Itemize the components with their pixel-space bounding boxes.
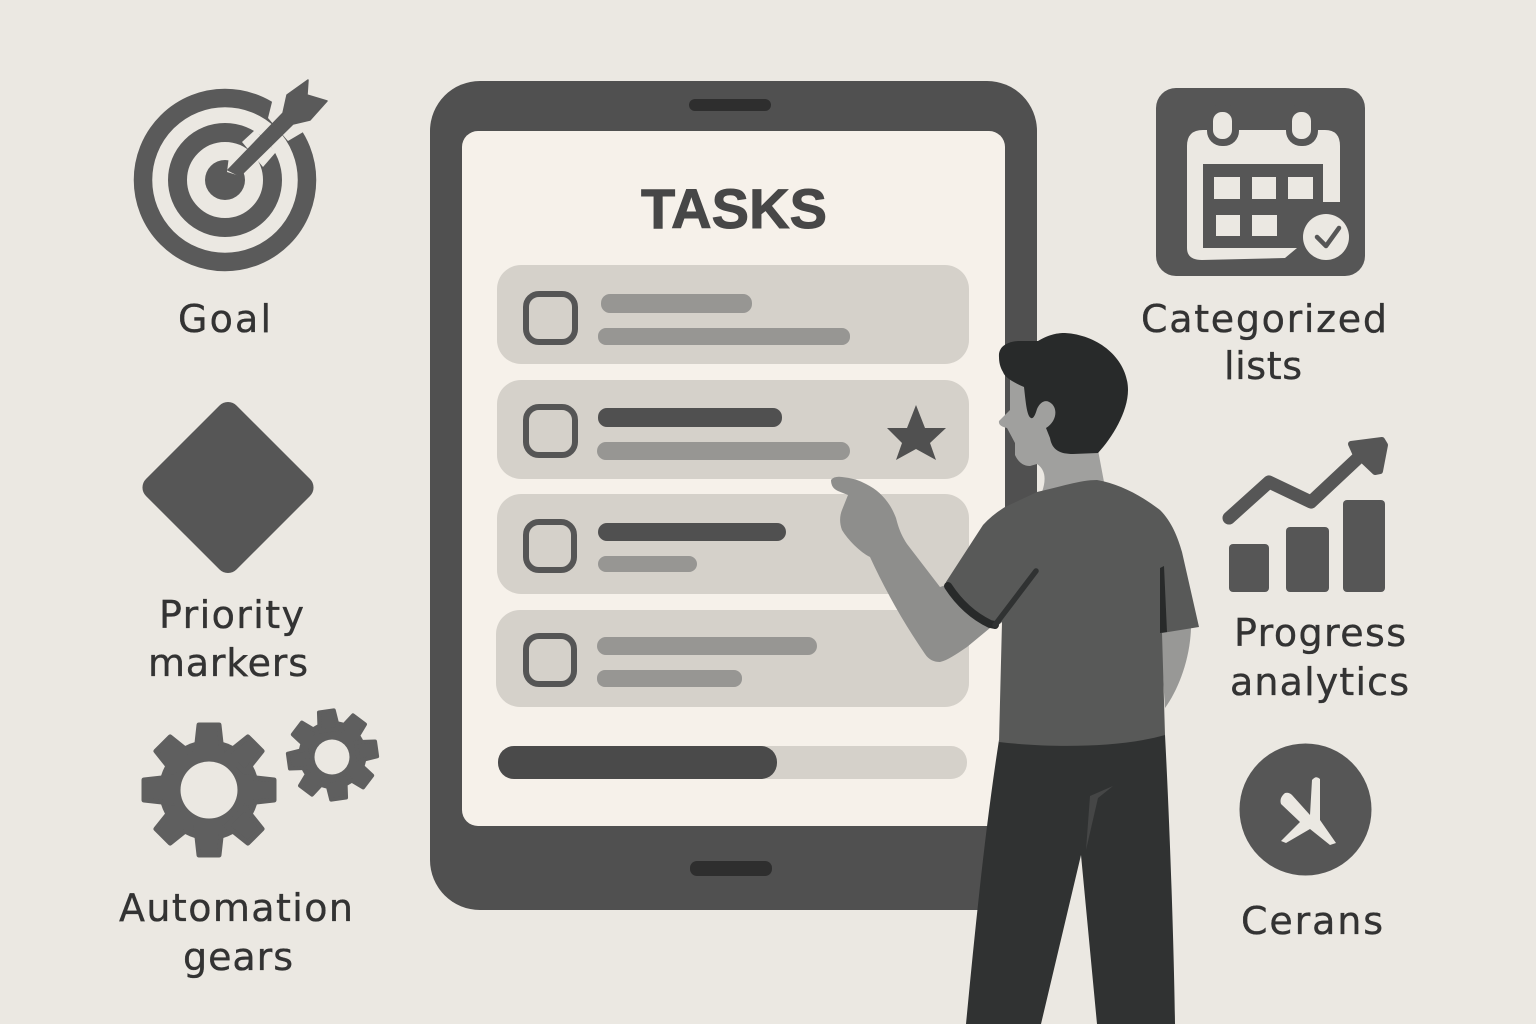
person hair [999, 333, 1128, 454]
icon: star [887, 405, 946, 460]
label: categorized lists: Categorized [1141, 297, 1387, 341]
person back sleeve crease [1160, 566, 1167, 633]
label: priority markers [148, 593, 308, 685]
icon: categorized lists calendar [1156, 88, 1365, 276]
label: progress analytics [1230, 611, 1409, 704]
icon: goal target [143, 80, 327, 262]
label: priority markers: Priority [159, 593, 304, 637]
person pointing at tablet [831, 333, 1199, 1024]
task row 4 [496, 610, 969, 707]
person neck and face [999, 376, 1104, 492]
label: categorized lists [1141, 297, 1387, 388]
person sleeve crease [995, 571, 1036, 625]
tablet screen [462, 131, 1005, 826]
label: progress analytics: Progress [1234, 611, 1406, 655]
person shirt [946, 480, 1199, 746]
icon: automation gears [144, 710, 377, 855]
icon: cerans circle [1240, 744, 1372, 876]
label: automation gears: gears [183, 935, 293, 979]
heading: tasks: TASKS [641, 177, 827, 240]
label: automation gears [119, 886, 353, 979]
person pointing arm and hand [831, 477, 990, 662]
label: automation gears: Automation [119, 886, 353, 930]
label: progress analytics: analytics [1230, 660, 1409, 704]
label: priority markers: markers [148, 641, 308, 685]
label: cerans: Cerans [1241, 899, 1383, 943]
person sleeve hem [948, 586, 995, 625]
task row 1 [497, 265, 969, 364]
label: categorized lists: lists [1224, 344, 1302, 388]
person legs [966, 735, 1175, 1024]
task row 2 [497, 380, 969, 479]
task row 3 [497, 494, 969, 594]
label: goal: Goal [178, 297, 271, 341]
tablet device [430, 81, 1037, 910]
person right arm [1160, 628, 1191, 708]
progress bar [498, 746, 967, 779]
icon: progress analytics chart [1229, 440, 1385, 592]
person pants crease [1086, 786, 1113, 850]
icon: priority diamond [137, 397, 319, 578]
